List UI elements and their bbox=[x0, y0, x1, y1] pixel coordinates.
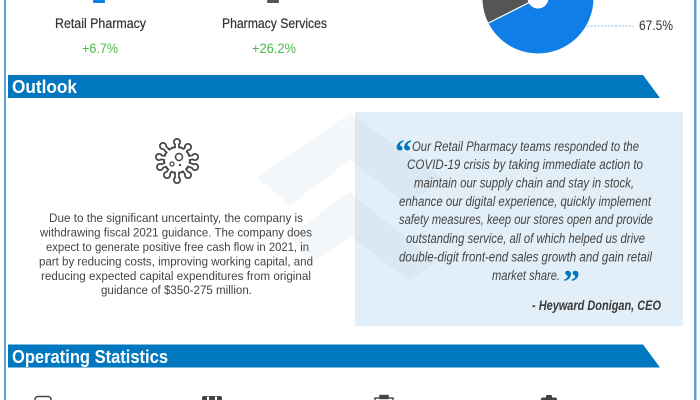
callout: CEO quote bbox=[395, 134, 661, 313]
callout: CEO quote: Our Retail Pharmacy teams responded to the bbox=[412, 139, 639, 154]
pie chart bbox=[482, 0, 673, 54]
pie chart: 67.5% bbox=[639, 18, 673, 33]
text block: outlook summary: reducing expected capital expenditures from original bbox=[41, 269, 311, 283]
callout: CEO quote: market share. bbox=[492, 268, 560, 283]
heading: Outlook bbox=[8, 75, 660, 98]
text block: outlook summary bbox=[39, 211, 313, 297]
callout: CEO quote: safety measures, keep our stores open and provide bbox=[399, 212, 653, 227]
icon: filled badge bbox=[541, 395, 557, 400]
text block: outlook summary: expect to generate positive free cash flow in 2021, in bbox=[46, 240, 309, 254]
revenue growth: pharmacy services bbox=[222, 0, 327, 56]
icon: closing quote mark: ” bbox=[563, 264, 580, 301]
icon: filled calendar bbox=[202, 396, 222, 400]
callout: CEO quote: outstanding service, all of which helped us drive bbox=[406, 231, 645, 246]
callout: CEO quote: enhance our digital experience, quickly implement bbox=[399, 194, 652, 209]
virus inner fill layer bbox=[159, 142, 195, 180]
heading: Operating Statistics bbox=[8, 344, 660, 368]
revenue growth: retail pharmacy: +6.7% bbox=[82, 40, 118, 56]
callout: CEO quote: - Heyward Donigan, CEO bbox=[532, 298, 661, 313]
callout: CEO quote: maintain our supply chain and stay in stock, bbox=[414, 176, 634, 190]
callout: CEO quote: double-digit front-end sales growth and gain retail bbox=[399, 250, 653, 264]
revenue growth: retail pharmacy: Retail Pharmacy bbox=[55, 16, 146, 31]
callout: CEO quote: COVID-19 crisis by taking immediate action to bbox=[407, 157, 643, 172]
text block: outlook summary: guidance of $350-275 million. bbox=[101, 283, 252, 297]
icon: virus bbox=[159, 142, 195, 180]
revenue growth: pharmacy services: Pharmacy Services bbox=[222, 16, 327, 31]
revenue growth: pharmacy services: +26.2% bbox=[252, 40, 296, 56]
heading: Operating Statistics: Operating Statistics bbox=[12, 346, 168, 367]
icon: outlined device bbox=[35, 396, 51, 400]
text block: outlook summary: withdrawing fiscal 2021 guidance. The company does bbox=[39, 226, 312, 240]
heading: Outlook: Outlook bbox=[12, 76, 78, 97]
virus outline layer bbox=[159, 142, 195, 180]
watermark chevrons bbox=[257, 113, 443, 280]
panel: quote background bbox=[355, 112, 683, 326]
text block: outlook summary: part by reducing costs, improving working capital, and bbox=[39, 254, 313, 268]
icon: clipboard bbox=[375, 396, 393, 400]
text block: outlook summary: Due to the significant uncertainty, the company is bbox=[49, 211, 303, 225]
revenue growth: retail pharmacy bbox=[55, 0, 146, 56]
icon: opening quote mark: “ bbox=[395, 134, 412, 171]
